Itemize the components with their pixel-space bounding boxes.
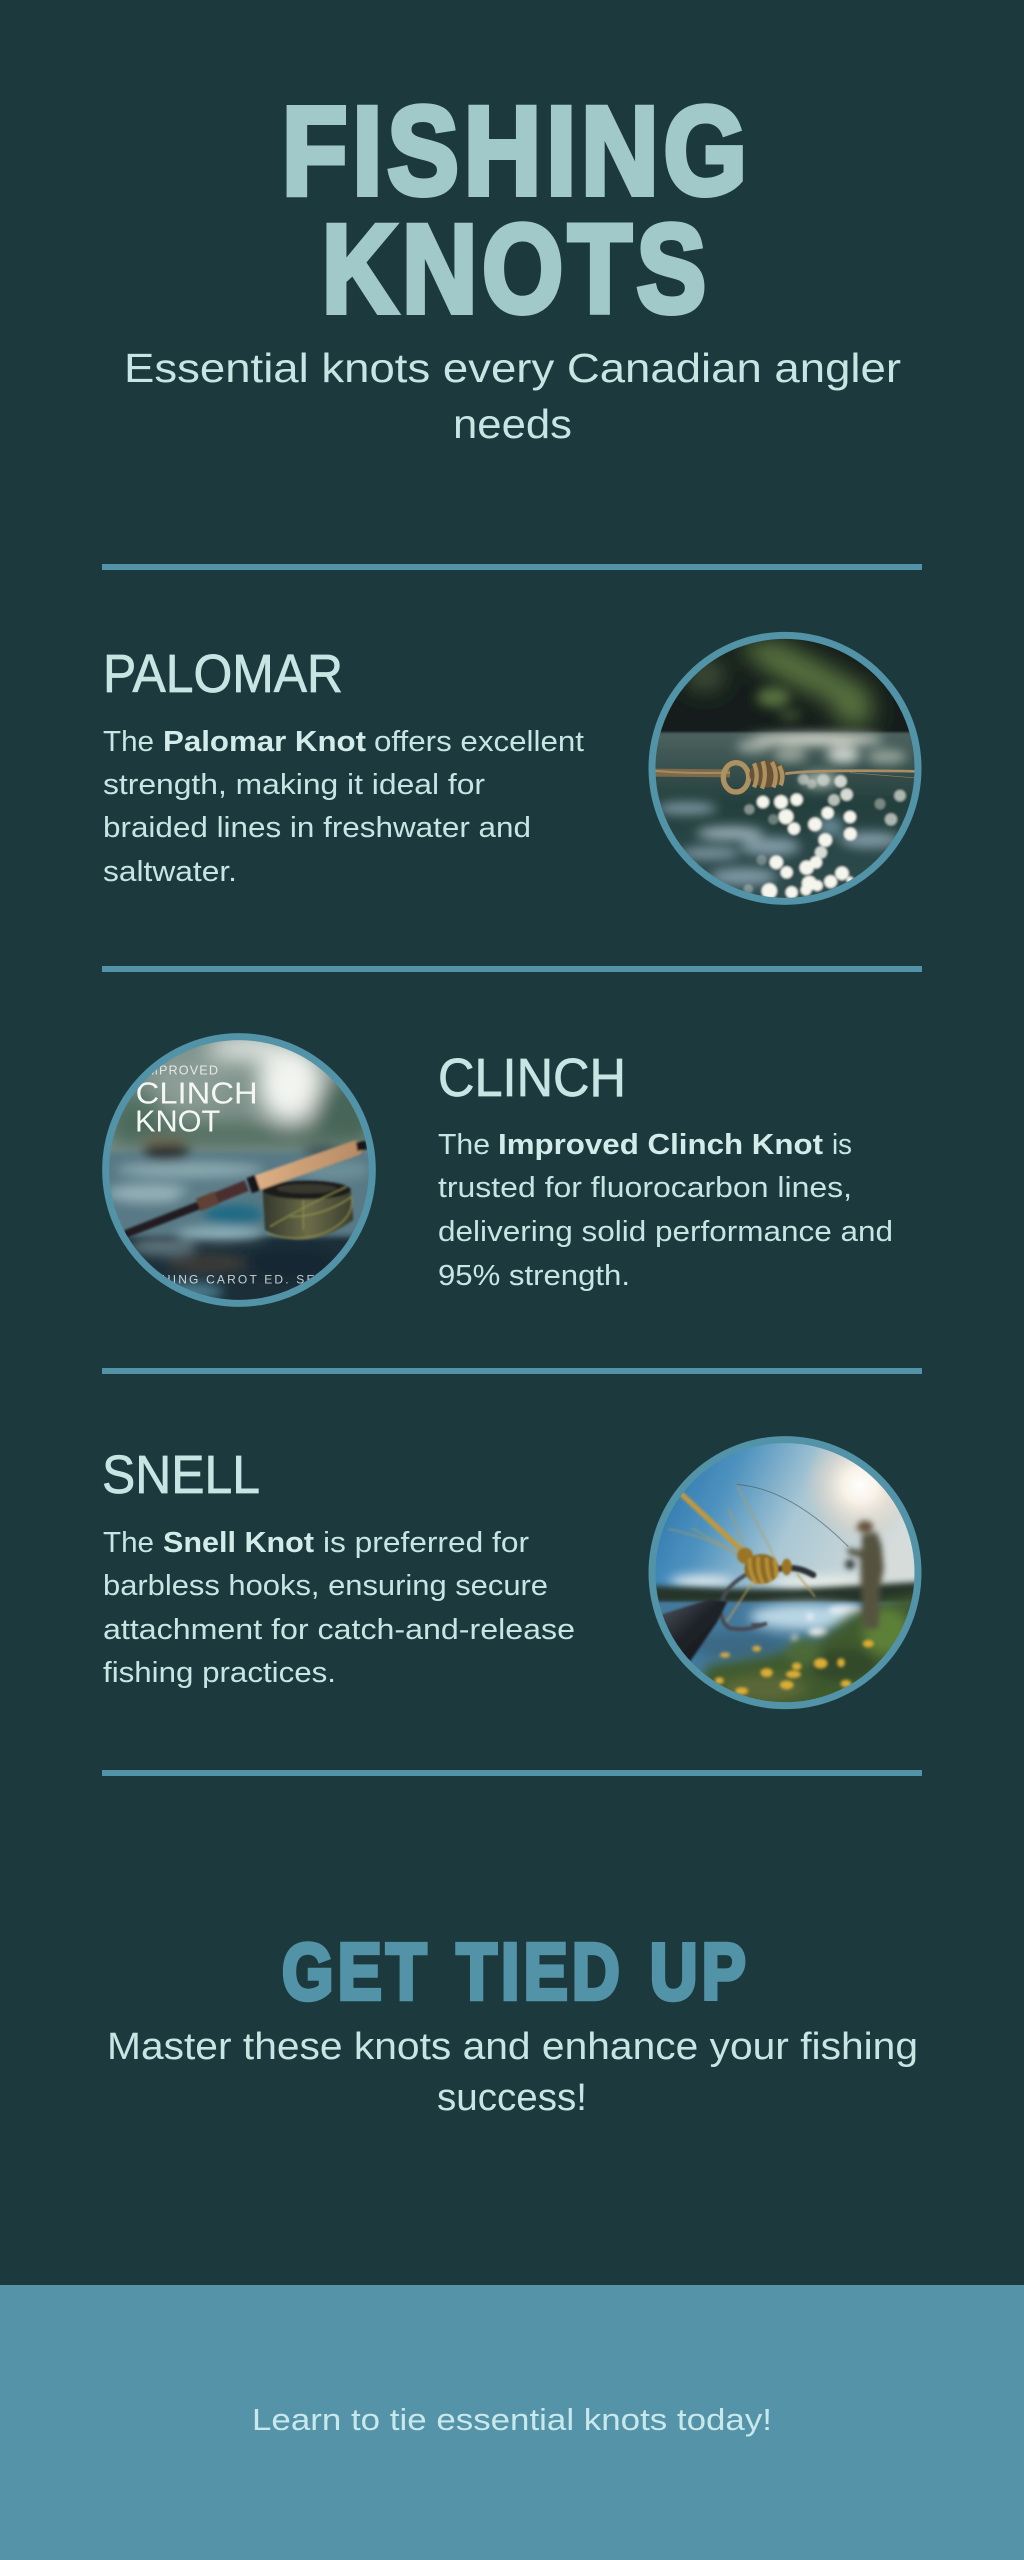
text block: palomar description: braided lines in freshwater and (103, 812, 531, 844)
text block: clinch description: trusted for fluorocarbon lines, (438, 1172, 852, 1204)
text block: snell description: fishing practices. (103, 1657, 336, 1689)
divider (102, 1770, 922, 1776)
ring (106, 1037, 372, 1303)
image lettering: IMPROVED (143, 1064, 218, 1078)
heading: snell: SNELL (102, 1445, 260, 1505)
knot and hook (660, 1485, 815, 1662)
text block: snell description: is preferred for (323, 1527, 529, 1559)
heading: clinch: CLINCH (438, 1048, 626, 1108)
subtitle (124, 345, 901, 447)
text block: clinch description: is (832, 1129, 852, 1161)
divider (102, 966, 922, 972)
text block: snell description: The (103, 1527, 154, 1559)
text block: snell description (103, 1527, 575, 1689)
image lettering: CLINCH (136, 1076, 258, 1110)
title: FISHING (282, 82, 752, 221)
image lettering: KNOT (135, 1105, 221, 1139)
text block: clinch description: 95% strength. (438, 1260, 630, 1292)
text block: snell description: Snell Knot (163, 1527, 314, 1559)
panel: clinch knot (100, 1033, 893, 1313)
subtitle: Essential knots every Canadian angler (124, 345, 901, 391)
footer band (0, 2285, 1024, 2560)
ring (652, 1440, 918, 1706)
text block: snell description: attachment for catch-and-release (103, 1614, 575, 1646)
text block: palomar description: strength, making it ideal for (103, 769, 485, 801)
text block: clinch description: delivering solid performance and (438, 1216, 893, 1248)
image: palomar knot on rope over sparkling water (647, 630, 923, 909)
text block: clinch description (438, 1129, 893, 1292)
text block: palomar description (103, 726, 584, 888)
subtitle: needs (453, 401, 572, 447)
closing message: Master these knots and enhance your fishing (107, 2026, 918, 2068)
panel: snell knot (102, 1428, 923, 1718)
heading: palomar: PALOMAR (103, 644, 343, 704)
angler (845, 1520, 884, 1628)
divider (102, 1368, 922, 1374)
ring (652, 635, 918, 901)
text block: snell description: barbless hooks, ensuring secure (103, 1570, 548, 1602)
rod (127, 1145, 367, 1240)
title: KNOTS (322, 200, 711, 339)
closing message: success! (437, 2077, 587, 2119)
divider (102, 564, 922, 570)
title (282, 82, 752, 339)
footer text: Learn to tie essential knots today! (252, 2402, 772, 2437)
spool (263, 1190, 353, 1240)
panel: palomar knot (103, 630, 923, 909)
image: snell knot on hook with angler at lake (647, 1428, 923, 1718)
text block: palomar description: offers excellent (374, 726, 584, 758)
image lettering: FISHING CAROT ED. SEL (137, 1272, 324, 1286)
heading: get tied up: GET TIED UP (282, 1927, 750, 2016)
image lettering (135, 1064, 324, 1286)
text block: palomar description: Palomar Knot (163, 726, 366, 758)
image: fishing rod and fluorocarbon spool (100, 1033, 380, 1313)
text block: palomar description: saltwater. (103, 856, 237, 888)
text block: palomar description: The (103, 726, 154, 758)
text block: clinch description: The (438, 1129, 490, 1161)
closing message (107, 2026, 918, 2119)
text block: clinch description: Improved Clinch Knot (498, 1129, 823, 1161)
